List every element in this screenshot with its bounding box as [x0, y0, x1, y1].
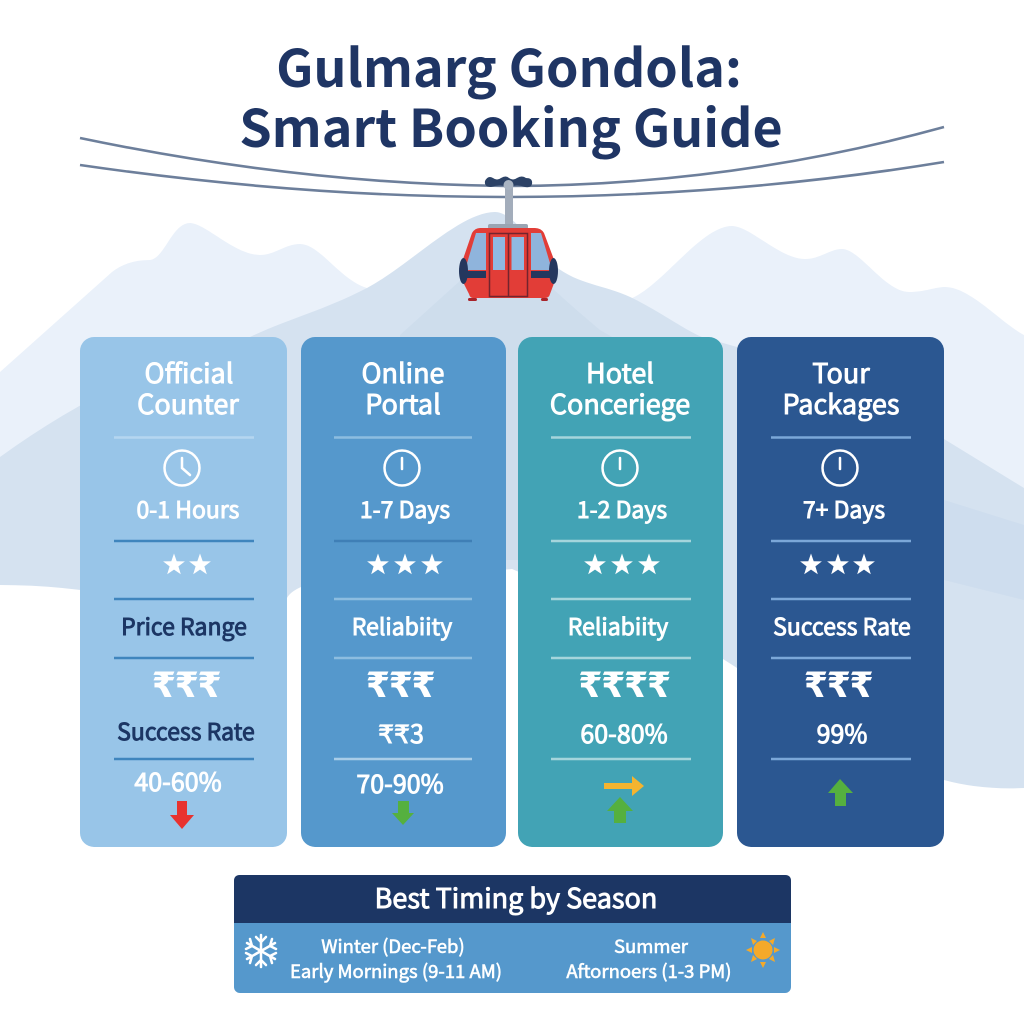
panel: hotel concierge: 60-80%	[580, 715, 668, 751]
panel: best timing by season: Aftornoers (1-3 PM)	[566, 958, 732, 984]
panel: online portal: ₹₹₹	[366, 666, 434, 706]
card heading: Hotel	[586, 352, 654, 391]
panel: tour packages: Success Rate	[773, 608, 911, 642]
panel: best timing by season: Early Mornings (9-11 AM)	[290, 958, 502, 984]
panel: best timing by season: Winter (Dec-Feb)	[321, 933, 465, 959]
icon: clock	[384, 450, 420, 486]
title	[239, 27, 783, 162]
icon: clock	[164, 450, 200, 486]
panel: hotel concierge: ₹₹₹₹	[578, 666, 670, 706]
rating stars	[367, 554, 443, 574]
icon: red down arrow	[170, 801, 194, 829]
background: mountains	[0, 212, 1024, 788]
panel: best timing by season: Best Timing by Season	[375, 877, 657, 916]
panel: official counter: ₹₹₹	[152, 666, 220, 706]
panel: hotel concierge	[518, 337, 723, 847]
rating stars	[163, 554, 211, 574]
panel: official counter: 0-1 Hours	[137, 491, 239, 525]
rating stars	[584, 554, 660, 574]
panel: tour packages: 7+ Days	[803, 491, 885, 525]
panel: best timing by season	[234, 875, 791, 993]
panel: online portal: 1-7 Days	[360, 491, 450, 525]
panel: online portal: Reliabiity	[352, 608, 452, 642]
panel: official counter: Success Rate	[117, 713, 255, 747]
icon: green up arrow	[828, 779, 853, 806]
cables	[80, 127, 944, 197]
icon: snowflake	[246, 935, 276, 967]
panel: hotel concierge: Reliabiity	[568, 608, 668, 642]
panel: online portal: Portal	[365, 383, 441, 422]
panel: tour packages: ₹₹₹	[804, 666, 872, 706]
panel: official counter: 40-60%	[134, 763, 222, 799]
panel: tour packages: 99%	[817, 715, 867, 751]
icon: sun	[746, 932, 780, 968]
panel: official counter: Price Range	[121, 608, 247, 642]
title: Smart Booking Guide	[239, 87, 783, 162]
panel: online portal: 70-90%	[356, 765, 444, 801]
panel: official counter: Counter	[137, 383, 239, 422]
icon: green down arrow	[392, 801, 414, 825]
panel: online portal: ₹₹3	[378, 715, 424, 751]
icon: yellow right arrow	[604, 776, 644, 796]
icon: green up arrow	[607, 797, 633, 823]
card heading: Online	[361, 352, 445, 391]
panel: online portal	[301, 337, 506, 847]
panel: best timing by season: Summer	[614, 933, 689, 959]
panel: hotel concierge: Conceriege	[550, 383, 690, 422]
icon: gondola cabin	[459, 176, 558, 301]
rating stars	[800, 554, 875, 574]
card heading: Tour	[812, 352, 870, 391]
panel: official counter	[80, 337, 287, 847]
panel: tour packages: Packages	[782, 383, 900, 422]
title: Gulmarg Gondola:	[276, 27, 742, 102]
icon: clock	[822, 450, 858, 486]
icon: clock	[602, 450, 638, 486]
card heading: Official	[145, 352, 233, 391]
panel: tour packages	[737, 337, 944, 847]
panel: hotel concierge: 1-2 Days	[577, 491, 667, 525]
